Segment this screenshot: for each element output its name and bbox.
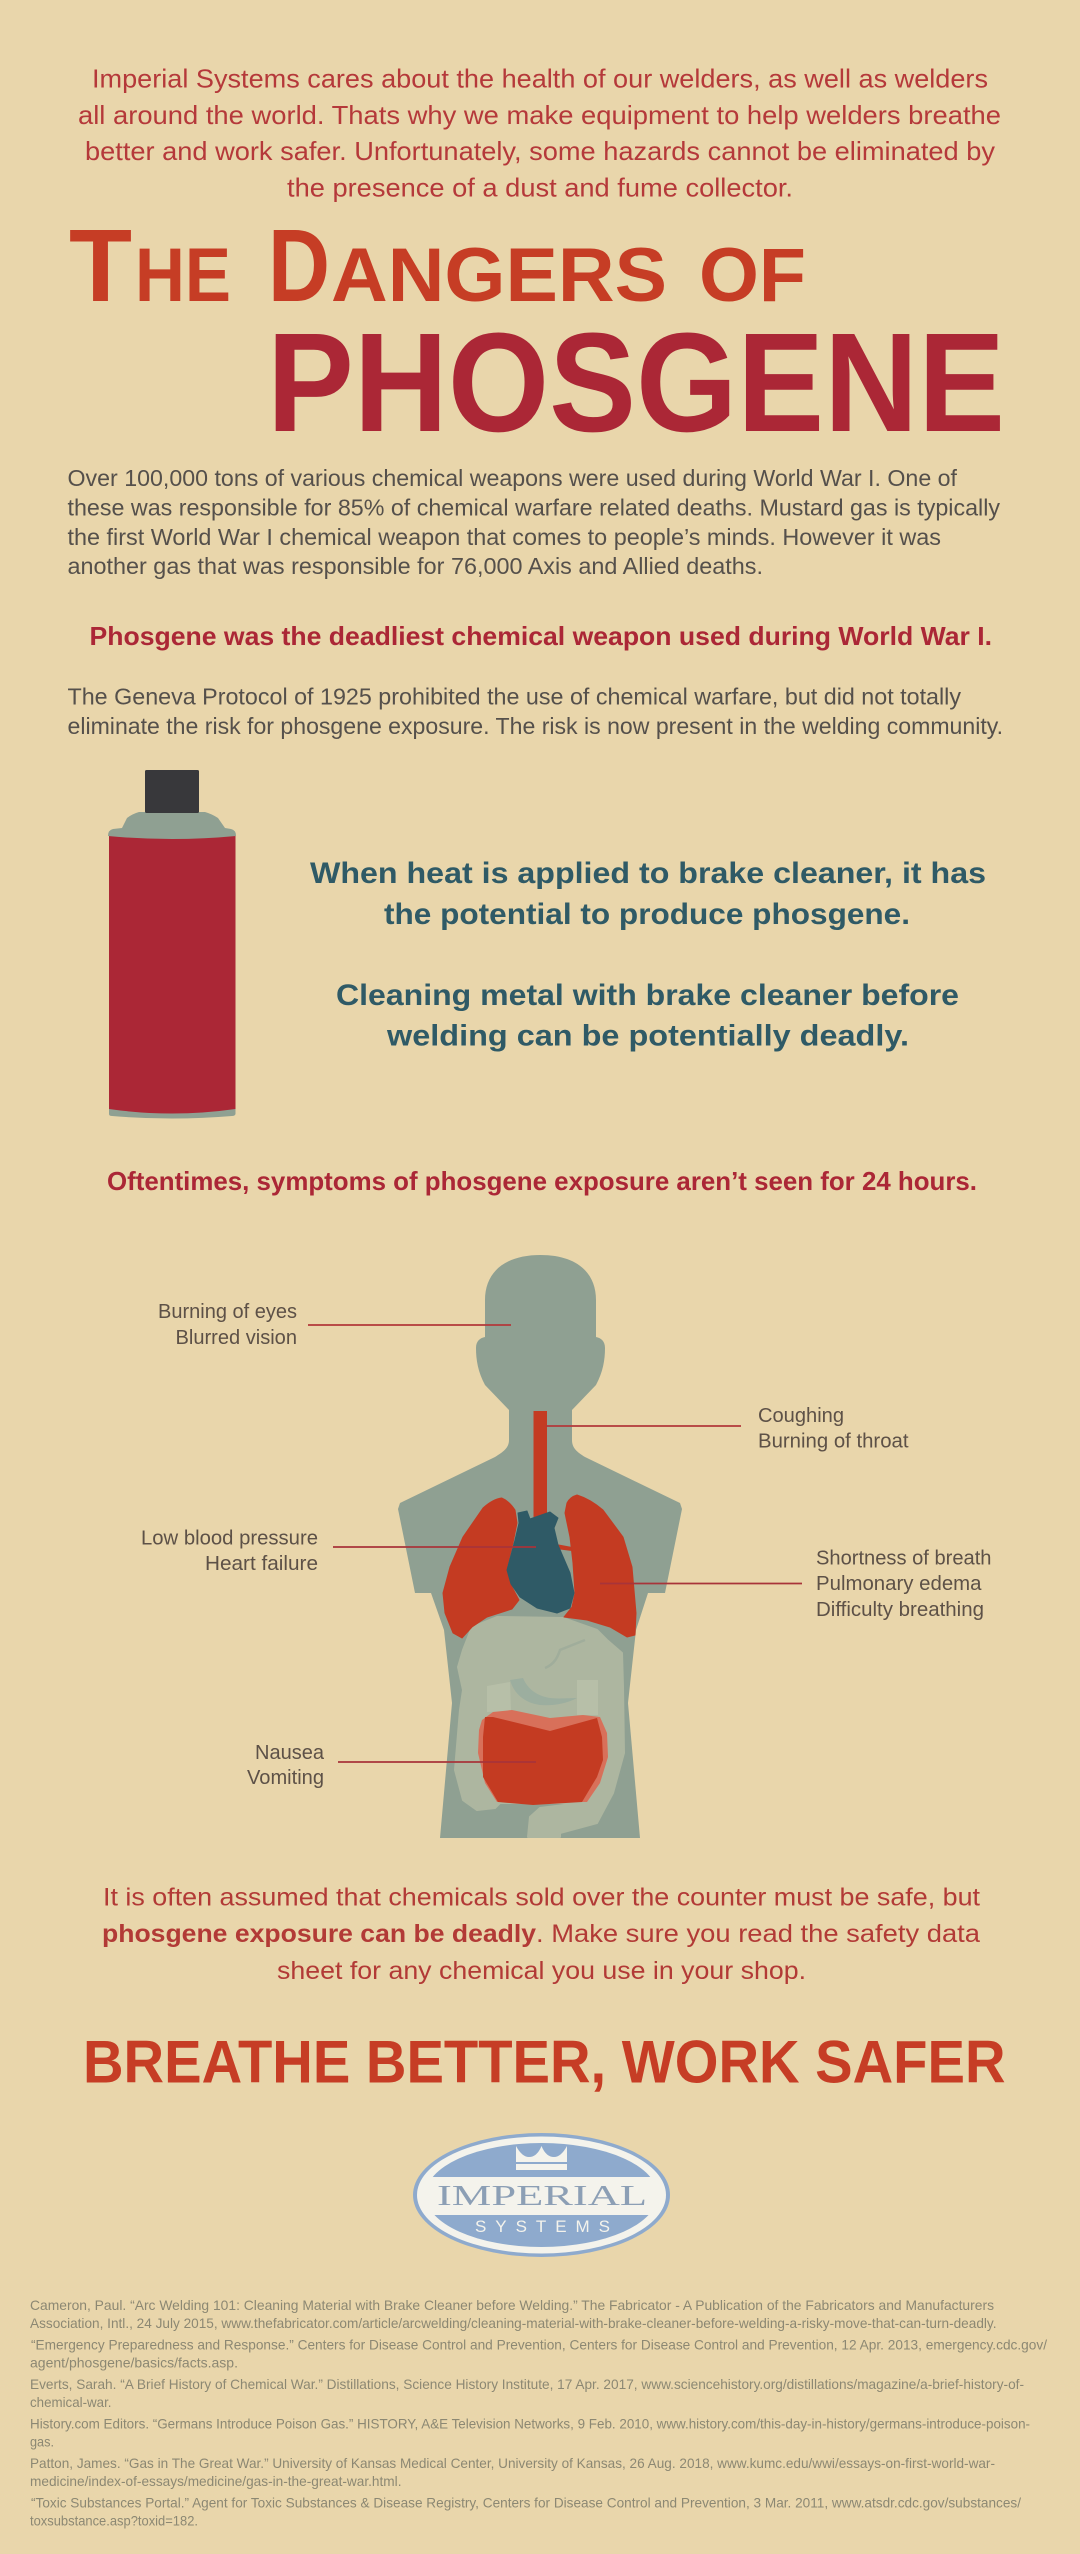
history paragraph: the first World War I chemical weapon that comes to people’s minds. However it was	[68, 524, 941, 550]
title	[69, 208, 1005, 461]
history paragraph: another gas that was responsible for 76,000 Axis and Allied deaths.	[68, 553, 763, 579]
references: agent/phosgene/basics/facts.asp.	[30, 2354, 238, 2370]
history paragraph: these was responsible for 85% of chemical warfare related deaths. Mustard gas is typically	[68, 494, 1001, 520]
brake cleaner warning text: Cleaning metal with brake cleaner before	[336, 979, 959, 1012]
heart	[507, 1511, 574, 1613]
history paragraph	[68, 465, 1001, 579]
left lung	[443, 1498, 519, 1638]
closing paragraph: It is often assumed that chemicals sold over the counter must be safe, but	[103, 1884, 980, 1912]
callout: stomach: Nausea	[255, 1742, 325, 1764]
title: ANGERS	[331, 233, 667, 318]
title: HE	[135, 233, 231, 318]
references: Everts, Sarah. “A Brief History of Chemical War.” Distillations, Science History Institute, 17 Apr. 2017, www.sciencehistory.org/distillations/magazine/a-brief-history-of-	[30, 2376, 1024, 2392]
closing paragraph: sheet for any chemical you use in your shop.	[277, 1957, 806, 1985]
Geneva Protocol paragraph: The Geneva Protocol of 1925 prohibited the use of chemical warfare, but did not totally	[68, 684, 962, 710]
references: “Toxic Substances Portal.” Agent for Toxic Substances & Disease Registry, Centers for Disease Control and Prevention, 3 Mar. 2011, www.atsdr.cdc.gov/substances/	[31, 2494, 1021, 2510]
callout: eyes: Blurred vision	[176, 1327, 297, 1349]
closing paragraph: phosgene exposure can be deadly	[102, 1920, 536, 1948]
callout: throat: Coughing	[758, 1405, 844, 1427]
right lung	[564, 1495, 636, 1637]
references: medicine/index-of-essays/medicine/gas-in-the-great-war.html.	[30, 2473, 402, 2489]
closing paragraph	[102, 1884, 980, 1985]
logo: Imperial Systems: SYSTEMS	[475, 2217, 610, 2236]
references: “Emergency Preparedness and Response.” Centers for Disease Control and Prevention, Centers for Disease Control and Prevention, 12 Apr. 2013, emergency.cdc.gov/	[31, 2336, 1047, 2352]
brake cleaner warning text: When heat is applied to brake cleaner, it has	[310, 857, 986, 890]
brake cleaner warning text: the potential to produce phosgene.	[384, 898, 910, 931]
title: T	[69, 208, 132, 323]
title: D	[268, 208, 330, 323]
Geneva Protocol paragraph: eliminate the risk for phosgene exposure. The risk is now present in the welding community.	[68, 713, 1003, 739]
callout: lungs: Pulmonary edema	[816, 1573, 982, 1595]
Geneva Protocol paragraph	[68, 684, 1003, 739]
intro text: all around the world. Thats why we make equipment to help welders breathe	[78, 100, 1001, 130]
callout: heart: Heart failure	[205, 1553, 318, 1575]
intro text: better and work safer. Unfortunately, some hazards cannot be eliminated by	[85, 136, 995, 166]
intro text	[78, 64, 1001, 202]
references: gas.	[30, 2434, 54, 2450]
references: Patton, James. “Gas in The Great War.” University of Kansas Medical Center, University of Kansas, 26 Aug. 2018, www.kumc.edu/wwi/essays-on-first-world-war-	[30, 2455, 995, 2471]
callout: heart: Low blood pressure	[141, 1528, 318, 1550]
callout: heart	[141, 1528, 536, 1575]
callout: stomach: Vomiting	[247, 1767, 324, 1789]
references: Association, Intl., 24 July 2015, www.thefabricator.com/article/arcwelding/cleaning-material-with-brake-cleaner-before-welding-a-risky-move-that-can-turn-deadly.	[30, 2315, 996, 2331]
callout: eyes	[158, 1301, 511, 1349]
crown	[516, 2146, 567, 2170]
icon: brake cleaner spray can	[108, 770, 236, 1118]
callout: throat	[546, 1405, 909, 1452]
references: History.com Editors. “Germans Introduce Poison Gas.” HISTORY, A&E Television Networks, 9 Feb. 2010, www.history.com/this-day-in-history/germans-introduce-poison-	[30, 2416, 1030, 2432]
digestive organs	[455, 1617, 624, 1837]
callout: lungs	[600, 1548, 992, 1621]
callout: lungs: Shortness of breath	[816, 1548, 992, 1570]
brake cleaner warning text	[310, 857, 986, 1052]
callout: stomach	[247, 1742, 536, 1789]
callout: eyes: Burning of eyes	[158, 1301, 297, 1323]
intestine	[478, 1710, 608, 1802]
references: toxsubstance.asp?toxid=182.	[30, 2512, 198, 2528]
logo: Imperial Systems	[413, 2133, 670, 2257]
intro text: Imperial Systems cares about the health of our welders, as well as welders	[92, 64, 988, 94]
human body diagram	[398, 1255, 682, 1838]
closing paragraph: . Make sure you read the safety data	[536, 1920, 980, 1948]
callout: throat: Burning of throat	[758, 1430, 909, 1452]
logo: Imperial Systems: IMPERIAL	[437, 2180, 647, 2212]
intro text: the presence of a dust and fume collector.	[287, 172, 793, 202]
references	[30, 2297, 1047, 2528]
callout: lungs: Difficulty breathing	[816, 1599, 984, 1621]
references: Cameron, Paul. “Arc Welding 101: Cleaning Material with Brake Cleaner before Welding.” The Fabricator - A Publication of the Fabricators and Manufacturers	[30, 2297, 994, 2313]
highlighted statement: Phosgene was the deadliest chemical weapon used during World War I.	[90, 621, 992, 651]
symptoms delay heading: Oftentimes, symptoms of phosgene exposure aren’t seen for 24 hours.	[107, 1166, 977, 1196]
brake cleaner warning text: welding can be potentially deadly.	[386, 1020, 909, 1052]
history paragraph: Over 100,000 tons of various chemical weapons were used during World War I. One of	[68, 465, 958, 491]
body silhouette	[398, 1255, 682, 1838]
trachea	[534, 1411, 547, 1519]
title: PHOSGENE	[267, 303, 1005, 461]
title: OF	[699, 233, 806, 318]
slogan: BREATHE BETTER, WORK SAFER	[83, 2028, 1006, 2096]
references: chemical-war.	[30, 2394, 112, 2410]
